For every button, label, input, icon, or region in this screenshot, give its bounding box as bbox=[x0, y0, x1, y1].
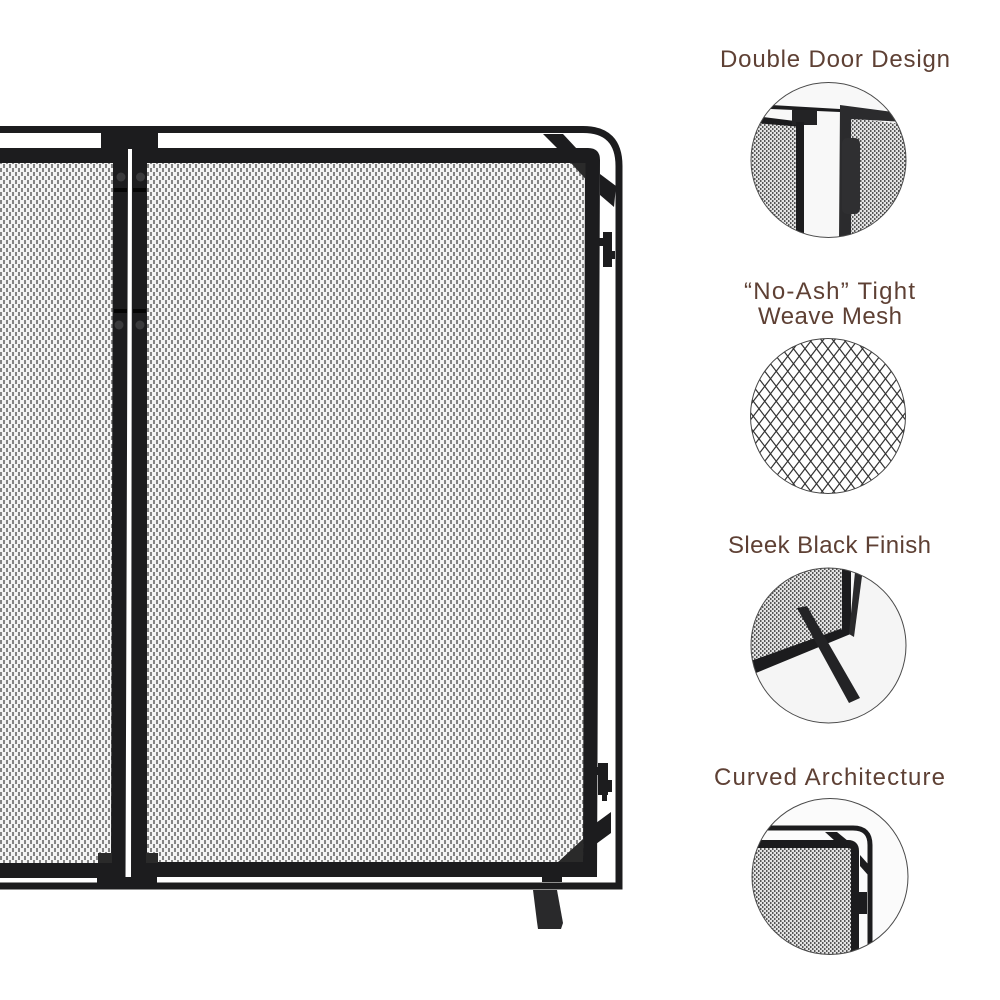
door straps and screws bbox=[114, 172, 146, 330]
heading: double door design: Double Door Design bbox=[720, 46, 950, 73]
icon: double door closeup bbox=[750, 82, 910, 240]
outer curved frame bbox=[0, 130, 619, 886]
bottom bracket bbox=[97, 877, 157, 886]
feature: double door design bbox=[720, 46, 950, 240]
foot tab bbox=[542, 877, 562, 882]
mesh corner gussets bbox=[98, 163, 586, 863]
icon: mesh closeup bbox=[750, 338, 906, 494]
top bracket bbox=[101, 132, 158, 149]
right door frame bbox=[131, 148, 600, 877]
heading: no-ash tight weave mesh bbox=[744, 278, 915, 330]
upper hinge bbox=[599, 232, 615, 267]
feature: sleek black finish bbox=[728, 532, 931, 723]
fireplace screen bbox=[0, 130, 619, 929]
heading: no-ash tight weave mesh: “No-Ash” Tight bbox=[744, 278, 915, 305]
right door mesh bbox=[146, 160, 586, 864]
right brace bottom bbox=[596, 812, 611, 844]
heading: curved architecture: Curved Architecture bbox=[714, 764, 945, 791]
icon: foot closeup bbox=[745, 565, 906, 723]
heading: sleek black finish: Sleek Black Finish bbox=[728, 532, 931, 559]
feature: curved architecture bbox=[714, 764, 945, 960]
left door frame bbox=[0, 148, 128, 878]
lower hinge bbox=[597, 763, 612, 801]
feature: tight weave mesh bbox=[744, 278, 915, 494]
foot bbox=[533, 890, 563, 929]
right brace top bbox=[600, 174, 616, 207]
left door mesh bbox=[0, 160, 114, 865]
heading: no-ash tight weave mesh: Weave Mesh bbox=[758, 303, 902, 330]
corner brace top bbox=[543, 134, 577, 149]
icon: corner closeup bbox=[750, 798, 908, 960]
